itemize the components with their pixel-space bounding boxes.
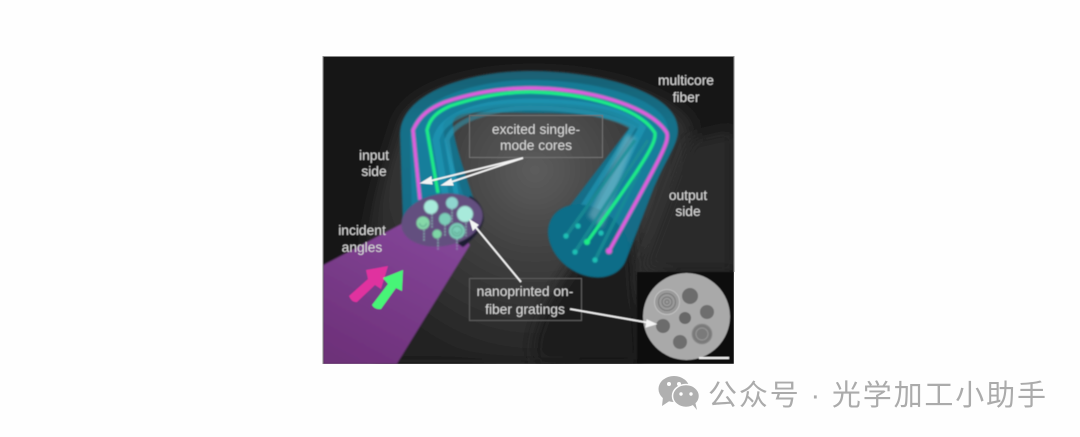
label: incident angles: angles: [342, 240, 382, 255]
label: input side: side: [361, 164, 387, 179]
label box: excited cores: excited single-: [492, 122, 580, 137]
arrows from label boxes: [421, 158, 656, 327]
scale bar: [699, 357, 729, 359]
arrow to green core: [448, 158, 523, 183]
label: incident angles: incident: [338, 223, 386, 238]
infographic canvas: [322, 56, 1045, 410]
label box: excited cores: [470, 116, 602, 158]
watermark text: 公众号 · 光学加工小助手: [708, 379, 1046, 412]
arrow to end-face grating: [473, 224, 521, 282]
input end face with gratings: [400, 192, 484, 250]
label box: nanoprinted gratings: nanoprinted on-: [477, 284, 573, 299]
label: output side: side: [675, 204, 701, 219]
incident angle arrows: [349, 266, 403, 309]
icon: wechat: [658, 376, 700, 410]
panel: fiber illustration: [323, 56, 734, 364]
label box: excited cores: mode cores: [500, 138, 572, 153]
arrow to inset grating: [570, 309, 650, 323]
multicore fiber tube: [400, 71, 678, 293]
panel border: [323, 56, 734, 364]
label box: nanoprinted gratings: fiber gratings: [485, 302, 565, 317]
label: multicore fiber: multicore: [658, 73, 714, 88]
green core: [427, 92, 655, 242]
watermark: [658, 376, 1046, 412]
label: multicore fiber: fiber: [673, 90, 700, 105]
output end of the tube: [547, 134, 648, 279]
magenta arrow: [349, 266, 388, 302]
label: output side: output: [669, 188, 707, 203]
label box: nanoprinted gratings: [470, 278, 582, 320]
arrow to magenta core: [430, 158, 523, 181]
green arrow: [372, 270, 403, 309]
incident light beam: [324, 223, 471, 364]
label: input side: input: [359, 148, 389, 163]
magenta core: [413, 88, 667, 251]
inset: micrograph of the fiber facet: [637, 272, 734, 364]
